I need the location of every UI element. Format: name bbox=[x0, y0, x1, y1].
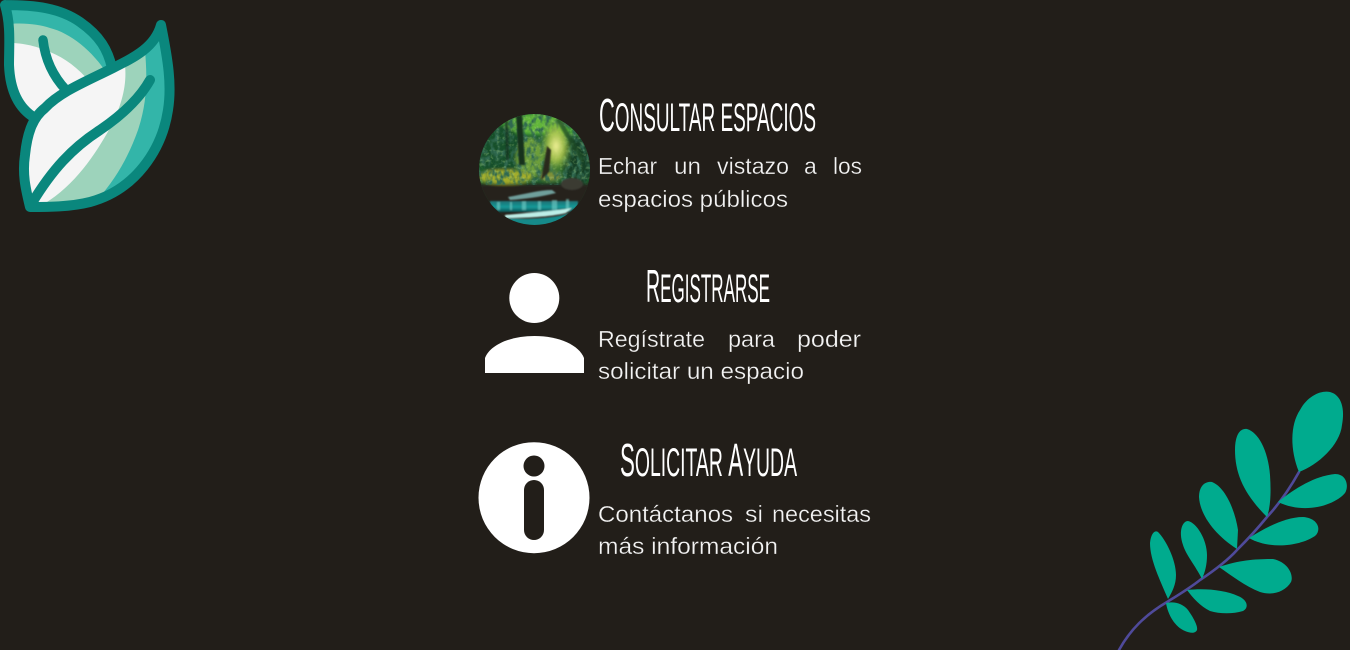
heading: SOLICITAR AYUDA bbox=[620, 434, 797, 486]
icon: person bbox=[485, 273, 584, 373]
icon: information bbox=[478, 442, 590, 553]
panel: registrarse bbox=[485, 260, 861, 384]
description: para bbox=[728, 326, 775, 352]
description: los bbox=[833, 153, 862, 179]
icon: green branch bbox=[1119, 392, 1347, 650]
icon: logo leaves bbox=[0, 0, 180, 215]
description: poder bbox=[797, 326, 861, 352]
description: necesitas bbox=[772, 501, 871, 527]
description bbox=[598, 153, 862, 212]
panel: consultar espacios bbox=[477, 89, 862, 226]
panel: solicitar ayuda bbox=[478, 434, 871, 559]
icon: forest and river photo bbox=[477, 113, 594, 226]
description: si bbox=[745, 501, 763, 527]
panel: consultar espacios: CONSULTAR ESPACIOS bbox=[599, 89, 816, 141]
description: solicitar un espacio bbox=[598, 358, 804, 384]
description: más información bbox=[598, 533, 778, 559]
front leaf bbox=[15, 15, 180, 215]
description: Echar bbox=[598, 153, 657, 179]
panel: registrarse: REGISTRARSE bbox=[646, 260, 770, 312]
description: vistazo bbox=[717, 153, 789, 179]
description: un bbox=[674, 153, 701, 179]
leaves bbox=[1150, 392, 1347, 633]
description: a bbox=[804, 153, 817, 179]
description bbox=[598, 326, 861, 384]
description: Contáctanos bbox=[598, 501, 733, 527]
description: Regístrate bbox=[598, 326, 705, 352]
back leaf bbox=[0, 0, 120, 125]
stem bbox=[1119, 472, 1299, 650]
description: espacios públicos bbox=[598, 186, 788, 212]
description bbox=[598, 501, 871, 559]
